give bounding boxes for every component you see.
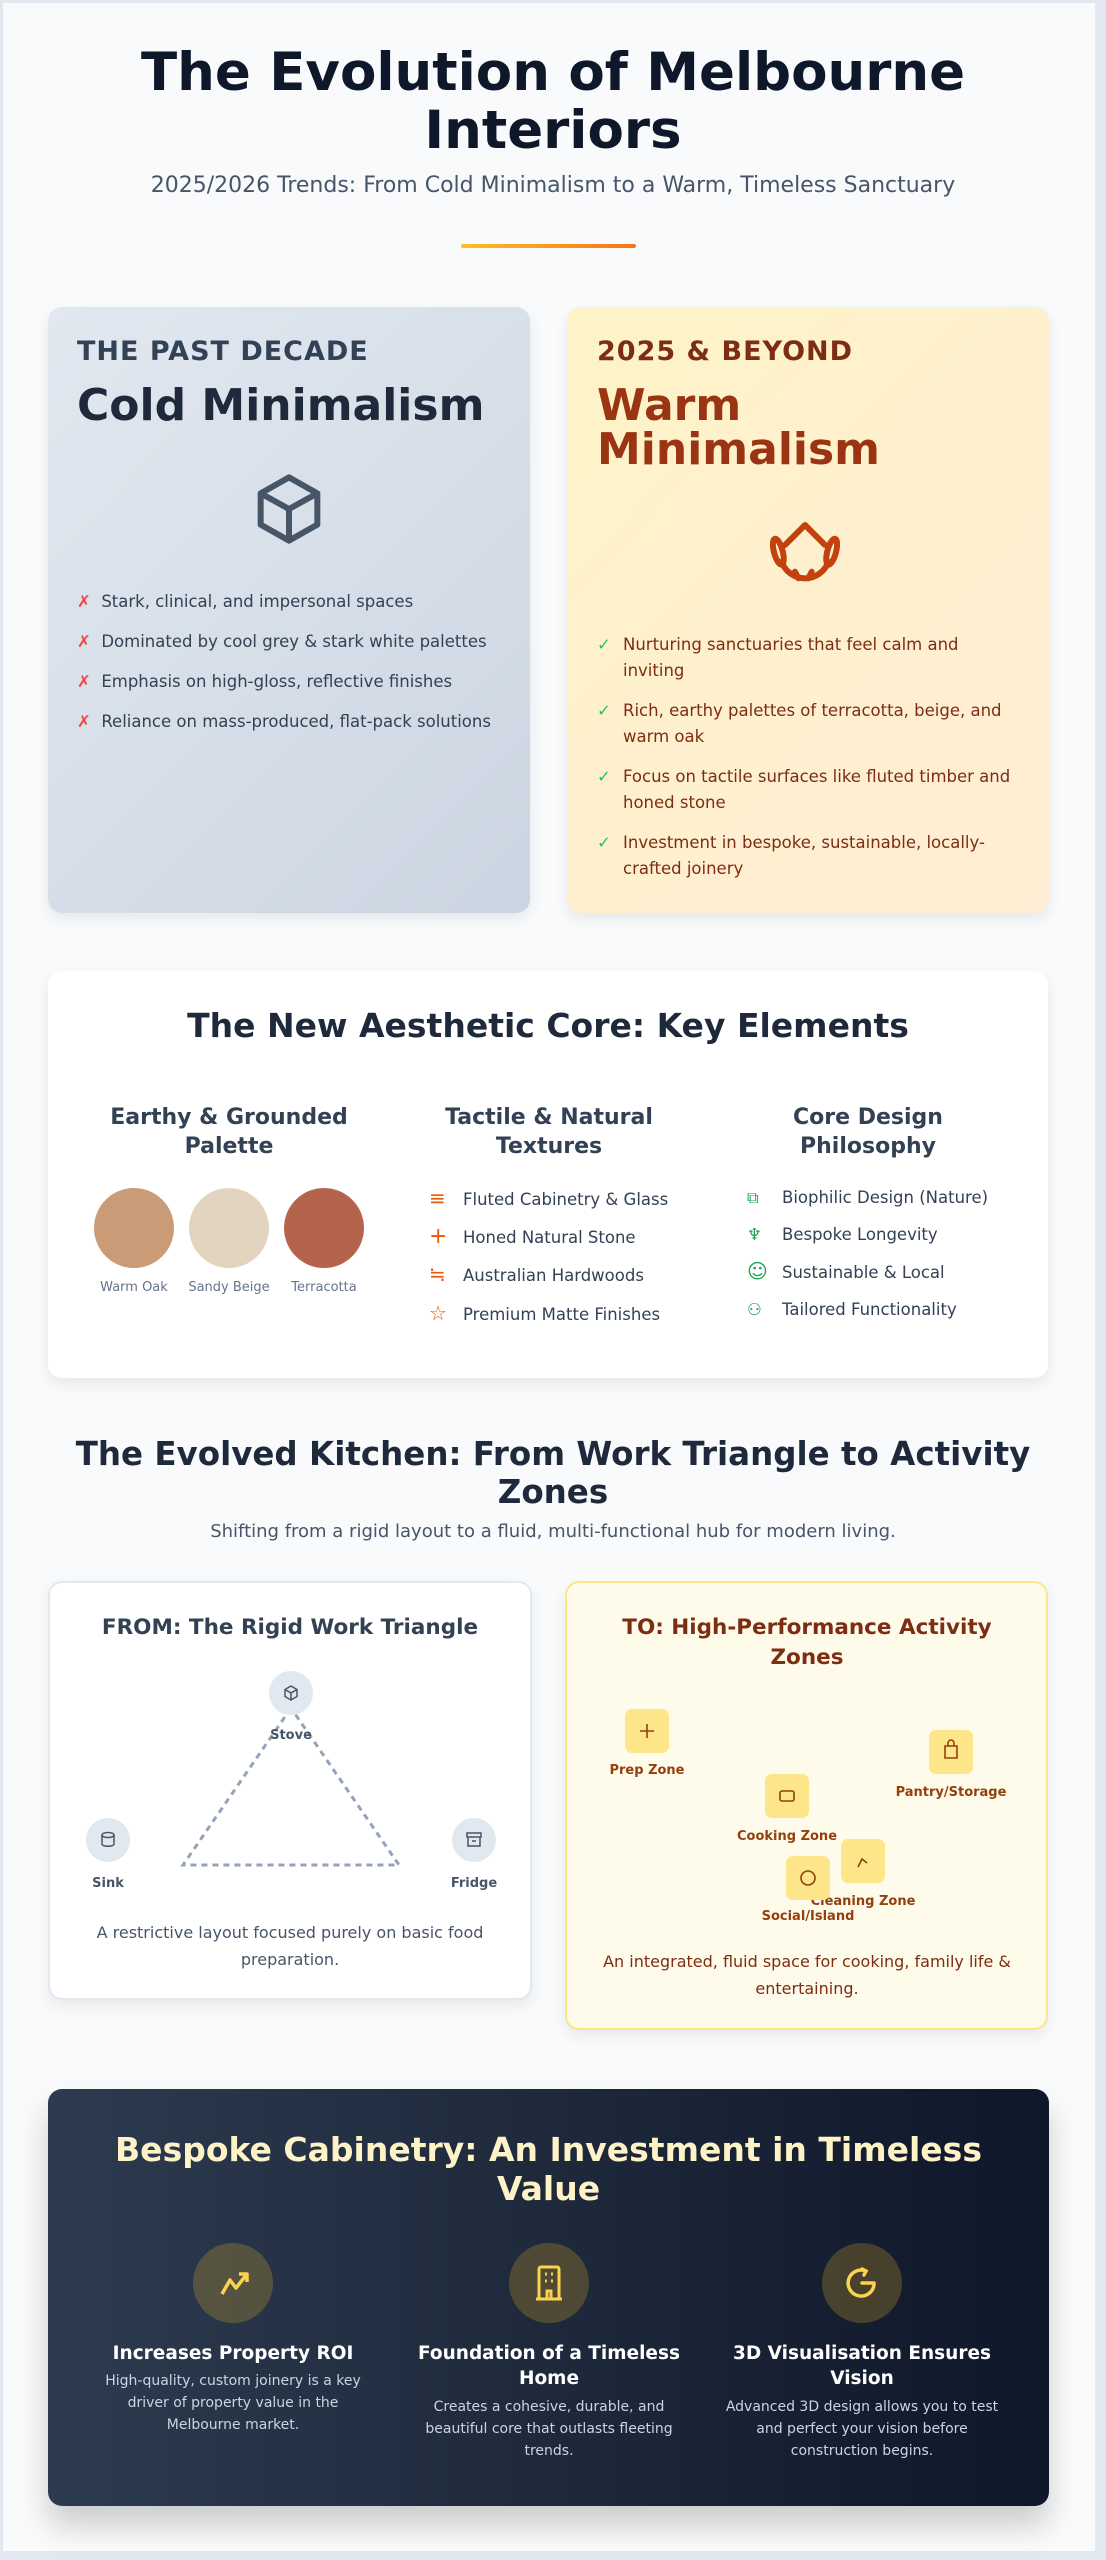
panel: cold minimalism: ✗ Dominated by cool grey & stark white palettes xyxy=(77,632,487,651)
column: textures: ≒ xyxy=(429,1262,446,1286)
heading warm xyxy=(597,380,880,475)
panel: warm minimalism: Nurturing sanctuaries that feel calm and inviting xyxy=(623,635,959,680)
panel: warm minimalism: ✓ xyxy=(597,635,611,654)
panel: activity zones xyxy=(565,1581,1048,2030)
icon: hands/home xyxy=(770,522,840,582)
heading to xyxy=(622,1615,992,1670)
subtitle: 2025/2026 Trends: From Cold Minimalism to a Warm, Timeless Sanctuary xyxy=(151,173,955,198)
column: philosophy: ☺ xyxy=(747,1259,768,1283)
heading to: Zones xyxy=(770,1645,844,1670)
column: philosophy: Tailored Functionality xyxy=(782,1300,957,1318)
item: 3D xyxy=(726,2243,998,2459)
column: philosophy: ⚇ xyxy=(747,1300,762,1318)
icon: building xyxy=(509,2243,589,2323)
column: textures: + xyxy=(429,1224,447,1248)
icon: cube xyxy=(258,474,320,544)
triangle diagram xyxy=(86,1671,497,1891)
column: philosophy: Core Design xyxy=(793,1105,943,1130)
column: textures: Honed Natural Stone xyxy=(463,1228,636,1246)
panel: cold minimalism xyxy=(48,307,530,913)
item: ROI: High-quality, custom joinery is a key driver of property value in the Melbourne market. xyxy=(105,2373,361,2433)
column: philosophy: ⧉ xyxy=(747,1188,759,1207)
panel: warm minimalism: ✓ xyxy=(597,767,611,786)
column: philosophy: Biophilic Design (Nature) xyxy=(782,1188,988,1207)
column: textures: Fluted Cabinetry & Glass xyxy=(463,1190,668,1209)
list warm xyxy=(597,635,1010,878)
heading kitchen xyxy=(76,1435,1030,1511)
item: foundation: Home xyxy=(519,2368,579,2389)
list cold xyxy=(77,592,491,731)
subtitle kitchen: Shifting from a rigid layout to a fluid, multi-functional hub for modern living. xyxy=(210,1521,896,1542)
heading bespoke xyxy=(115,2130,982,2208)
column: palette xyxy=(94,1105,364,1295)
panel: warm minimalism: ✓ xyxy=(597,701,611,720)
panel: warm minimalism: Focus on tactile surfaces like fluted timber and honed stone xyxy=(623,767,1010,812)
heading bespoke: Bespoke Cabinetry: An Investment in Timeless xyxy=(115,2130,982,2169)
column: textures: ☆ xyxy=(429,1300,447,1324)
item: foundation xyxy=(418,2243,680,2459)
item: ROI xyxy=(105,2243,361,2433)
panel: cold minimalism: ✗ Stark, clinical, and impersonal spaces xyxy=(77,592,413,611)
zones diagram: Cleaning Zone xyxy=(811,1894,916,1909)
zones diagram: Cooking Zone xyxy=(737,1829,837,1844)
accent line xyxy=(461,244,636,248)
item: 3D: Vision xyxy=(830,2368,894,2389)
panel: work triangle xyxy=(48,1581,532,2000)
heading cold: Cold Minimalism xyxy=(77,380,484,431)
panel: warm minimalism: Investment in bespoke, sustainable, locally-crafted joinery xyxy=(623,833,985,878)
item: foundation: Creates a cohesive, durable, and beautiful core that outlasts fleeting trends. xyxy=(425,2399,673,2459)
column: textures: Tactile & Natural xyxy=(445,1105,653,1130)
panel: bespoke cabinetry xyxy=(48,2089,1049,2506)
item: ROI: Increases Property ROI xyxy=(113,2343,353,2364)
desc from: A restrictive layout focused purely on basic food preparation. xyxy=(97,1923,483,1969)
panel: aesthetic core: Warm Oak xyxy=(100,1280,168,1295)
heading aesthetic: The New Aesthetic Core: Key Elements xyxy=(187,1006,909,1045)
column: textures: Premium Matte Finishes xyxy=(463,1304,660,1324)
zones diagram: Social/Island xyxy=(762,1909,854,1924)
panel: warm minimalism xyxy=(567,307,1049,913)
column: palette: Palette xyxy=(185,1134,273,1159)
zones diagram xyxy=(609,1709,1007,1924)
column: philosophy: ♆ xyxy=(747,1224,762,1244)
triangle diagram: Stove xyxy=(270,1728,312,1743)
item: foundation: Foundation of a Timeless xyxy=(418,2343,680,2364)
title xyxy=(141,42,965,161)
panel: cold minimalism: ✗ Emphasis on high-gloss, reflective finishes xyxy=(77,672,452,691)
column: textures: ≡ xyxy=(429,1186,446,1210)
column: philosophy: Philosophy xyxy=(800,1134,936,1159)
panel: warm minimalism: Rich, earthy palettes of terracotta, beige, and warm oak xyxy=(623,701,1002,746)
item: 3D: 3D Visualisation Ensures xyxy=(733,2343,991,2364)
column: philosophy: Sustainable & Local xyxy=(782,1263,945,1282)
panel: aesthetic core: Sandy Beige xyxy=(188,1280,270,1295)
heading from: FROM: The Rigid Work Triangle xyxy=(102,1615,478,1640)
column: palette: Earthy & Grounded xyxy=(110,1105,348,1130)
heading bespoke: Value xyxy=(497,2169,600,2208)
panel: warm minimalism: ✓ xyxy=(597,833,611,852)
panel: aesthetic core: Terracotta xyxy=(291,1280,357,1295)
heading warm: Warm xyxy=(597,380,741,431)
item: 3D: Advanced 3D design allows you to test and perfect your vision before construction begins. xyxy=(726,2399,998,2459)
icon: trend xyxy=(193,2243,273,2323)
column: philosophy: Bespoke Longevity xyxy=(782,1224,938,1244)
title: Interiors xyxy=(424,100,682,161)
heading kitchen: The Evolved Kitchen: From Work Triangle to Activity xyxy=(76,1435,1030,1473)
title: The Evolution of Melbourne xyxy=(141,42,965,103)
label past decade: THE PAST DECADE xyxy=(77,336,369,367)
zones diagram: Pantry/Storage xyxy=(896,1785,1007,1800)
column: philosophy xyxy=(747,1105,988,1318)
column: textures xyxy=(429,1105,668,1324)
label 2025: 2025 & BEYOND xyxy=(597,336,853,367)
panel: cold minimalism: ✗ Reliance on mass-produced, flat-pack solutions xyxy=(77,712,491,731)
column: textures: Textures xyxy=(496,1134,602,1159)
desc to: An integrated, fluid space for cooking, family life & entertaining. xyxy=(603,1952,1011,1998)
heading to: TO: High-Performance Activity xyxy=(622,1615,992,1640)
panel: aesthetic core xyxy=(48,971,1048,1378)
triangle diagram: Fridge xyxy=(451,1876,497,1891)
icon: rotate xyxy=(822,2243,902,2323)
triangle diagram: Sink xyxy=(92,1876,124,1891)
column: textures: Australian Hardwoods xyxy=(463,1266,644,1285)
heading warm: Minimalism xyxy=(597,424,880,475)
heading kitchen: Zones xyxy=(498,1473,608,1511)
zones diagram: Prep Zone xyxy=(609,1763,685,1778)
swatches xyxy=(94,1188,174,1268)
